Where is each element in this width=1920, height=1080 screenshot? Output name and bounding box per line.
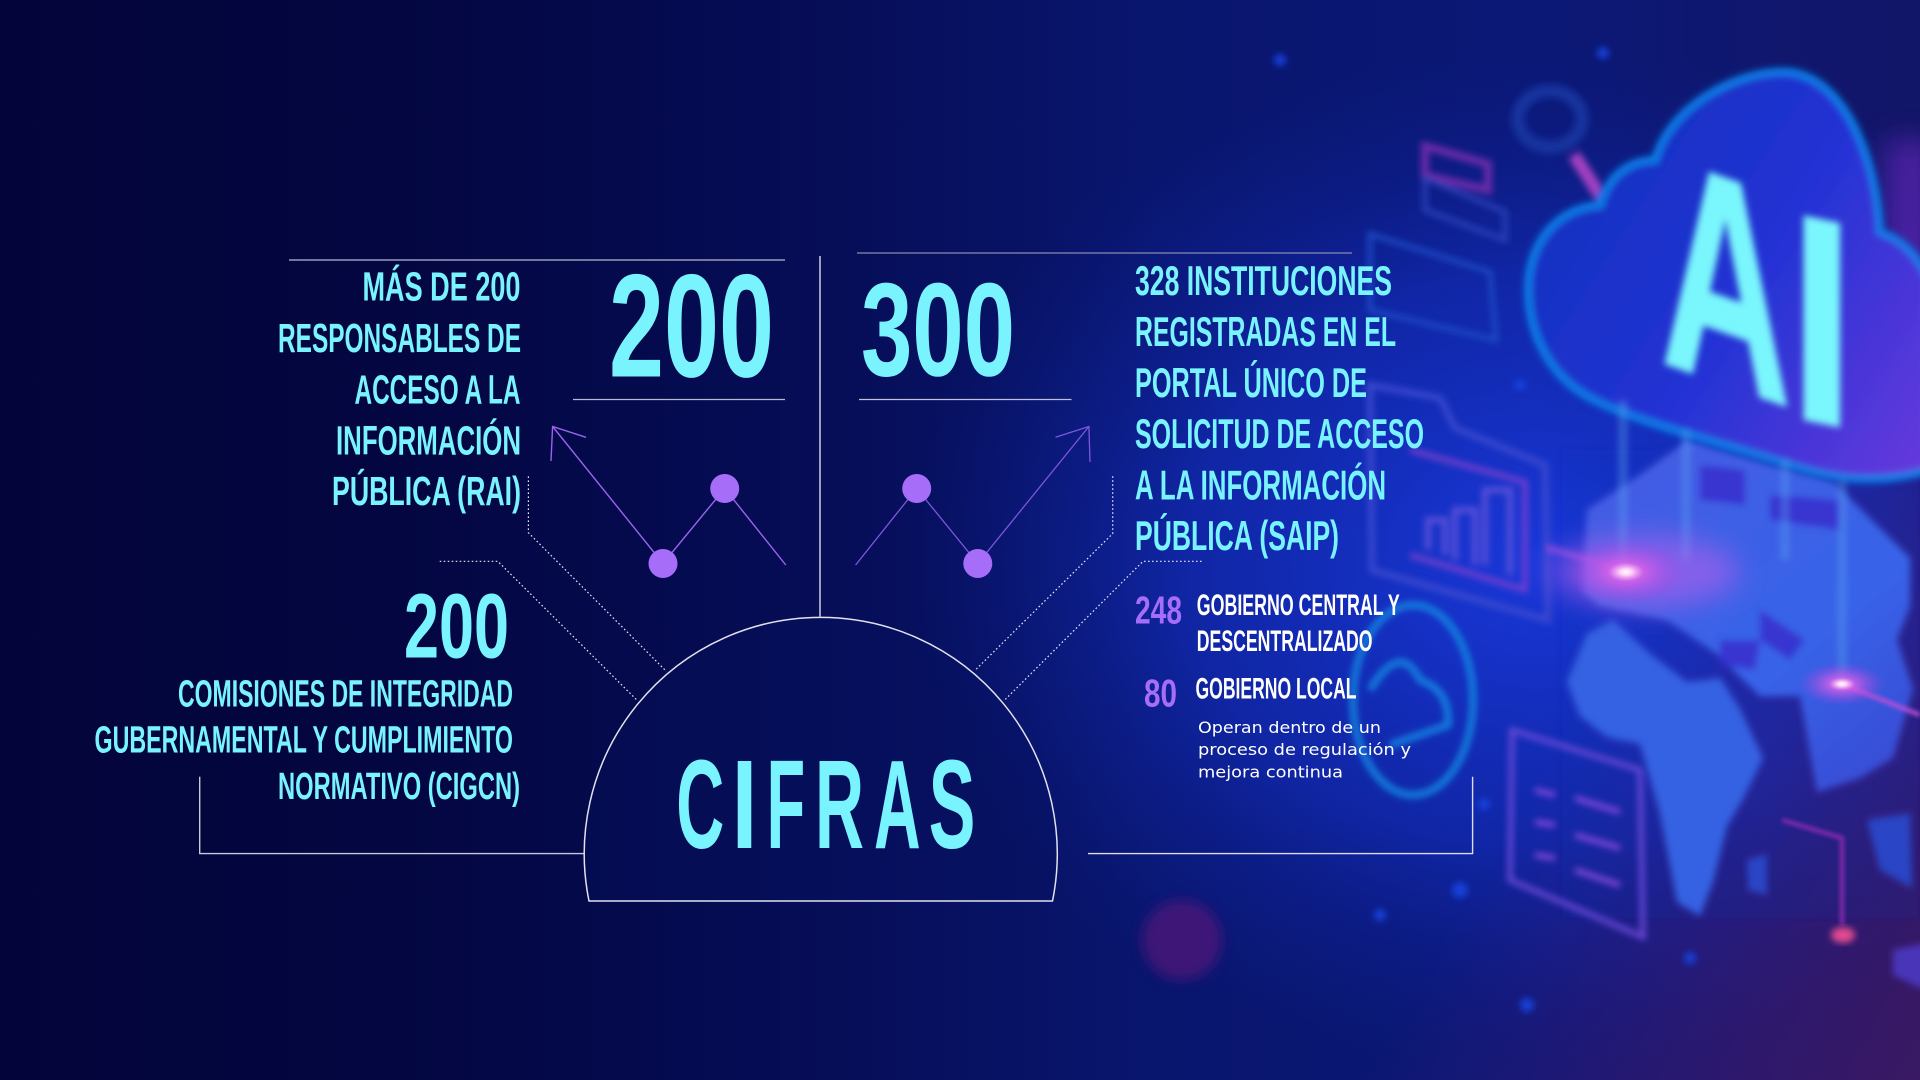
text: operan dentro: proceso de regulación y <box>1198 740 1411 759</box>
title <box>676 734 975 875</box>
text: instituciones registradas: REGISTRADAS EN EL <box>1135 308 1396 355</box>
big number 300: 300 <box>861 256 1015 404</box>
illustration: blurred AI cloud and world map <box>1142 47 1920 1012</box>
icon: checklist document <box>1510 730 1643 937</box>
title: A <box>874 734 921 875</box>
text: operan dentro: Operan dentro de un <box>1198 718 1381 737</box>
panel: left group <box>94 244 786 854</box>
small background dots <box>1274 47 1696 1012</box>
text: responsables de acceso <box>278 264 521 514</box>
title: S <box>929 734 975 875</box>
text: responsables de acceso: INFORMACIÓN <box>336 418 521 464</box>
left bracket <box>200 777 584 854</box>
text: comisiones de integridad: NORMATIVO (CIGCN) <box>278 766 520 808</box>
stat: 80 gobierno local: GOBIERNO LOCAL <box>1196 672 1356 705</box>
title: R <box>815 734 864 875</box>
right sub rule <box>859 398 1072 400</box>
text: instituciones registradas: PORTAL ÚNICO DE <box>1135 358 1367 406</box>
stat: 248 gobierno central: GOBIERNO CENTRAL Y <box>1197 589 1400 622</box>
title: F <box>767 734 805 875</box>
text: instituciones registradas: SOLICITUD DE ACCESO <box>1135 410 1424 457</box>
text: comisiones de integridad <box>94 674 520 808</box>
text: instituciones registradas: 328 INSTITUCIONES <box>1135 257 1392 304</box>
text: comisiones de integridad: COMISIONES DE INTEGRIDAD <box>178 674 513 716</box>
stat: 80 gobierno local: 80 <box>1144 673 1177 716</box>
big number 200: 200 <box>609 244 774 408</box>
stat: 248 gobierno central: 248 <box>1135 589 1182 632</box>
text: instituciones registradas <box>1135 257 1424 559</box>
left chart line with arrow <box>551 426 786 578</box>
title: C <box>676 734 724 875</box>
icon: small cloud circle <box>1353 605 1473 795</box>
right chart line with arrow <box>856 426 1090 578</box>
AI lettering: I <box>1788 149 1856 493</box>
text: instituciones registradas: PÚBLICA (SAIP) <box>1135 511 1339 559</box>
dotted connectors left <box>440 476 666 700</box>
dotted connectors right <box>975 476 1202 700</box>
text: responsables de acceso: RESPONSABLES DE <box>278 315 521 361</box>
stat: 248 gobierno central: DESCENTRALIZADO <box>1197 625 1372 658</box>
world map <box>1560 441 1920 990</box>
left top rule <box>289 260 785 400</box>
icon: magnifier <box>1518 91 1605 203</box>
right top rule <box>857 252 1352 254</box>
stat: 80 gobierno local <box>1144 672 1356 716</box>
panel: right group <box>856 253 1473 854</box>
AI lettering <box>1661 92 1856 493</box>
stat: 248 gobierno central <box>1135 589 1400 658</box>
text: operan dentro: mejora continua <box>1198 762 1343 782</box>
circuit lines and glowing nodes <box>1550 400 1920 943</box>
text: operan dentro <box>1198 718 1411 782</box>
text: responsables de acceso: MÁS DE 200 <box>362 264 520 310</box>
dome with title <box>584 617 1057 901</box>
number 200 comisiones: 200 <box>404 576 509 678</box>
icon: document stack <box>1370 146 1505 340</box>
center divider <box>819 256 821 616</box>
text: responsables de acceso: PÚBLICA (RAI) <box>332 468 521 514</box>
right bracket <box>1088 777 1473 854</box>
icon: decorative circle <box>1142 900 1222 980</box>
text: comisiones de integridad: GUBERNAMENTAL Y CUMPLIMIENTO <box>94 720 513 762</box>
icon: folder with bars <box>1370 385 1625 620</box>
AI lettering: A <box>1661 92 1790 469</box>
text: instituciones registradas: A LA INFORMACIÓN <box>1135 460 1386 508</box>
icon: AI cloud <box>1528 72 1920 493</box>
text: responsables de acceso: ACCESO A LA <box>354 366 520 412</box>
title: I <box>732 734 758 875</box>
